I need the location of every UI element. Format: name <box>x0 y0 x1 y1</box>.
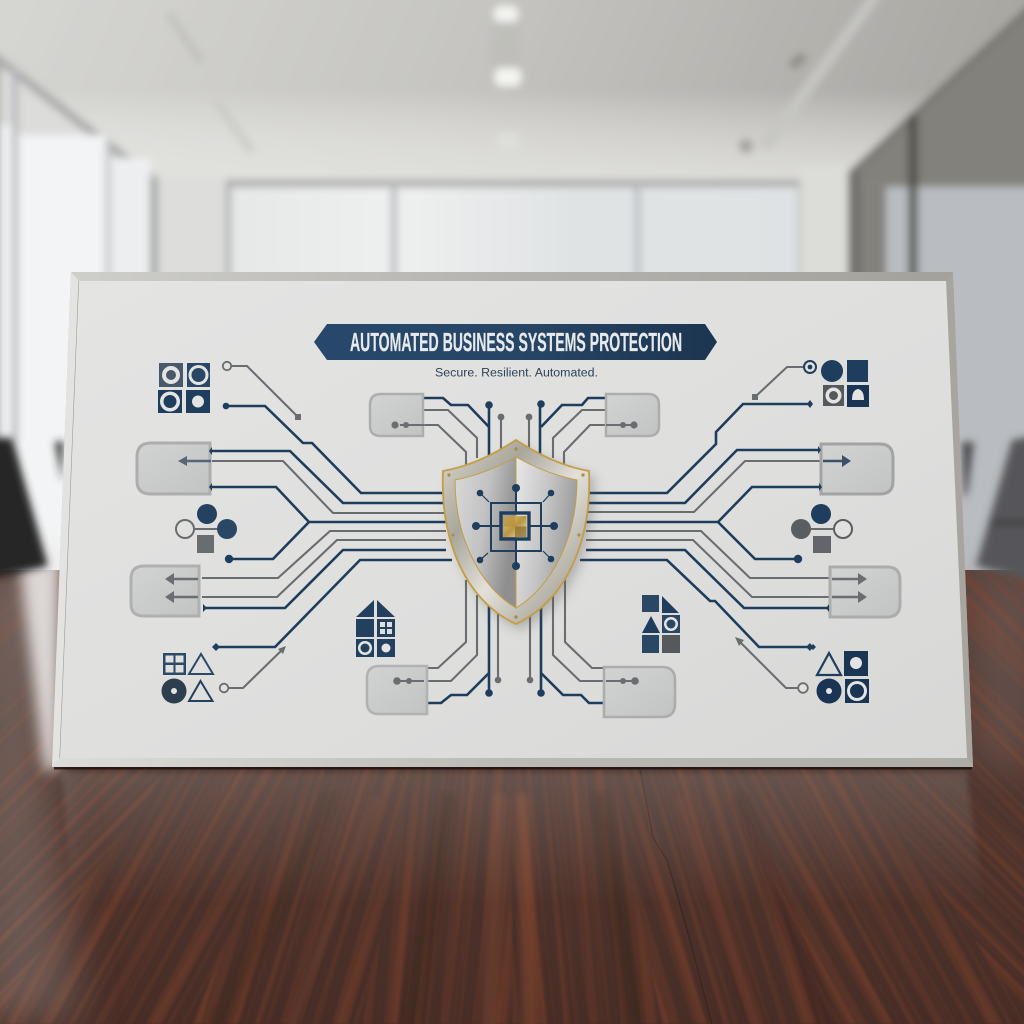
left table sheen <box>0 570 80 1024</box>
chip and nodes <box>476 488 554 566</box>
connector box: middle left upper <box>137 443 212 494</box>
shield plate <box>455 457 516 608</box>
office background <box>0 0 1024 592</box>
icon: top left ring squares <box>158 363 210 413</box>
right glass wall <box>800 0 1024 592</box>
shield nodes <box>472 484 558 570</box>
subtitle: Secure. Resilient. Automated. <box>435 368 598 380</box>
shield rim <box>443 440 589 624</box>
icon: bottom left shapes <box>162 653 213 704</box>
display board frame <box>52 272 973 767</box>
wood colour bands <box>215 800 830 1024</box>
connector box: middle left lower <box>131 566 207 616</box>
back wall and windows <box>155 178 855 288</box>
icon: middle right blocks <box>642 595 680 653</box>
table surface <box>0 569 1024 1024</box>
shield drop shadow <box>450 446 594 630</box>
left window wall <box>0 48 158 590</box>
right table sheen <box>972 575 1024 770</box>
board panel <box>60 281 967 758</box>
wood grain fan <box>0 572 1024 1024</box>
icon: top right shapes <box>821 360 869 407</box>
title banner <box>314 324 717 360</box>
icon: right node cluster <box>791 504 852 553</box>
connector box: middle right lower <box>826 567 900 617</box>
connector box: middle right upper <box>818 444 893 494</box>
ceiling light strips <box>165 0 882 154</box>
board shadow on table <box>54 766 972 770</box>
trace terminal nodes <box>212 361 816 697</box>
icon: house blocks <box>356 600 395 657</box>
icon: left node cluster <box>176 504 237 553</box>
board reflection <box>62 772 985 905</box>
right chair <box>962 436 1024 582</box>
connector box: bottom left <box>367 666 427 714</box>
icon: bottom right shapes <box>816 651 869 704</box>
dark wood seam <box>640 770 712 1024</box>
shield rivets <box>447 447 585 619</box>
shield <box>443 440 594 630</box>
connector box: top left <box>370 394 424 436</box>
gold core <box>504 516 526 537</box>
connector box: bottom right <box>604 667 675 717</box>
title text: AUTOMATED BUSINESS SYSTEMS PROTECTION <box>350 329 682 357</box>
connector box: top right <box>606 394 659 436</box>
circuit traces right <box>529 367 835 703</box>
circuit traces left <box>189 366 501 703</box>
left chair <box>0 438 63 580</box>
